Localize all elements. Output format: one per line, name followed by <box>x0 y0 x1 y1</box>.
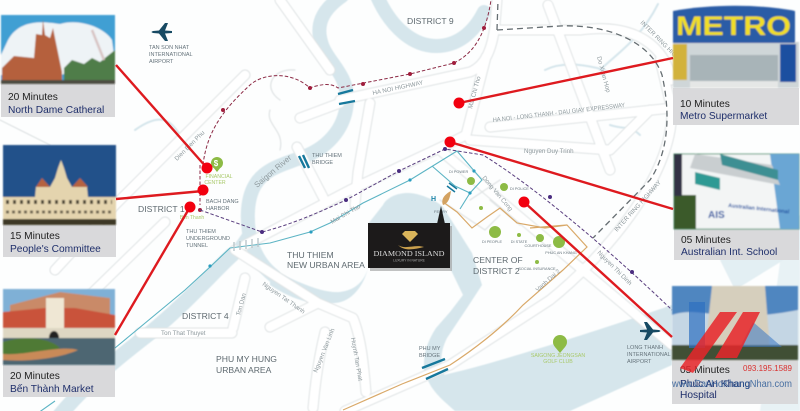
callout: Metro Supermarket <box>673 6 799 125</box>
green pin labels: DI POWER <box>449 170 468 174</box>
map labels: Do Xuan Hop <box>595 56 612 94</box>
diamond island marker: DIAMOND ISLAND <box>374 249 445 258</box>
callout: Ben Thanh Market: 20 Minutes <box>10 371 60 382</box>
map labels: THU THIEM <box>312 153 342 159</box>
callout: Australian International School: Australian International <box>728 203 790 215</box>
callout: Australian International School: AIS <box>708 210 725 221</box>
map labels: Nguyen Duy Trinh <box>524 148 574 155</box>
callout: People's Committee: People's Committee <box>10 244 101 255</box>
map labels: BRIDGE <box>419 353 440 359</box>
map: ring road dashes <box>497 0 667 238</box>
callout: People's Committee <box>3 145 116 257</box>
map: orange route <box>343 202 587 410</box>
green pin labels: H <box>431 196 436 203</box>
watermark: 093.195.1589 <box>743 363 792 373</box>
map labels: CENTER OF <box>473 255 523 265</box>
map labels: HA NOI HIGHWAY <box>372 79 424 97</box>
map labels: Nguyen Thi Dinh <box>596 249 633 287</box>
map labels: TUNNEL <box>186 243 208 249</box>
map labels: NEW URBAN AREA <box>287 260 365 270</box>
green pin labels: DI STATE <box>511 240 528 244</box>
map labels: Vanh Dai 2 <box>535 268 562 293</box>
map labels: Dien Bien Phu <box>173 129 207 162</box>
bridges <box>299 90 457 379</box>
green pin labels: COURTHOUSE <box>525 244 552 248</box>
green pin labels: SAIGONG JEONGSAN <box>531 353 585 359</box>
callout: Metro Supermarket: Metro Supermarket <box>680 111 767 122</box>
map: purple metro route <box>200 147 672 310</box>
map labels: PHU MY HUNG <box>216 354 277 364</box>
green map pins <box>211 157 567 353</box>
callout: Ben Thanh Market <box>3 289 115 397</box>
green pin labels: FERRY <box>434 209 448 214</box>
map labels: INTERNATIONAL <box>627 352 671 358</box>
callout: Metro Supermarket: 10 Minutes <box>680 99 730 110</box>
map labels: INTER RING HIGHWAY <box>639 19 690 71</box>
map labels: Ton That Thuyet <box>161 330 206 337</box>
map: teal tunnel route <box>38 151 482 411</box>
green pin labels: CENTER <box>204 180 226 186</box>
map labels: Nguyen Tat Thanh <box>261 281 307 316</box>
icon: Tan Son Nhat plane <box>152 23 172 41</box>
watermark <box>671 302 792 390</box>
diamond island marker <box>368 191 452 271</box>
map labels: BRIDGE <box>312 160 333 166</box>
map labels <box>138 16 690 382</box>
map labels: DISTRICT 1 <box>138 204 185 214</box>
map labels: AIRPORT <box>149 59 174 65</box>
map labels: Mai Chi Tho <box>467 75 483 110</box>
map labels: Dong Van Cong <box>480 175 514 213</box>
map labels: AIRPORT <box>627 359 652 365</box>
map labels: HA NOI - LONG THANH - DAU GIAY EXPRESSWAY <box>492 102 625 124</box>
callout: Australian International School: 05 Minutes <box>681 235 731 246</box>
callout: Australian International School <box>674 154 799 260</box>
watermark: www.CanHoKhangNhan.com <box>671 379 792 390</box>
map labels: Ton Dan <box>235 292 248 317</box>
callout: Phuc An Khang Hospital: 05 Minutes <box>680 365 730 376</box>
callout: Notre Dame <box>1 15 115 117</box>
callout: Phuc An Khang Hospital: Hospital <box>680 390 717 401</box>
green pin labels <box>180 159 585 365</box>
map labels: LONG THANH <box>627 345 663 351</box>
red connector lines <box>115 58 673 337</box>
green pin labels: GOLF CLUB <box>543 359 573 365</box>
map labels: Huynh Tan Phat <box>349 337 364 382</box>
callout: People's Committee: 15 Minutes <box>10 231 60 242</box>
map labels: DISTRICT 2 <box>473 266 520 276</box>
map labels: URBAN AREA <box>216 365 272 375</box>
green pin labels: DI POLICE <box>510 187 529 191</box>
green pin labels: FINANCIAL <box>205 174 233 180</box>
map: red metro route <box>198 0 491 212</box>
callout: Metro Supermarket: METRO <box>676 11 791 41</box>
map labels: BACH DANG <box>206 199 239 205</box>
red location dots <box>184 98 530 212</box>
map labels: Saigon River <box>253 153 294 190</box>
map labels: DISTRICT 4 <box>182 311 229 321</box>
map labels: UNDERGROUND <box>186 236 230 242</box>
map labels: HARBOR <box>206 206 230 212</box>
green pin labels: $ <box>214 159 219 168</box>
callout: Notre Dame: 20 Minutes <box>8 92 58 103</box>
callout: Phuc An Khang Hospital <box>672 286 798 404</box>
map labels: Nguyen Van Linh <box>312 327 337 374</box>
map labels: Mai Chi Tho <box>330 203 362 226</box>
callout: Ben Thanh Market: Bến Thành Market <box>10 383 94 395</box>
green pin labels: PHUC AN KHANG <box>545 251 577 255</box>
green pin labels: SOCIAL INSURANCE <box>518 267 556 271</box>
callout: Australian International School: Australian Int. School <box>681 247 777 258</box>
map labels: THU THIEM <box>287 250 334 260</box>
map labels: INTERNATIONAL <box>149 52 193 58</box>
map labels: PHU MY <box>419 346 441 352</box>
map labels: INTER RING HIGHWAY <box>613 179 663 233</box>
icon: Long Thanh plane <box>640 322 660 340</box>
green pin labels: DI PEOPLE <box>482 240 502 244</box>
map labels: DISTRICT 9 <box>407 16 454 26</box>
callout: Notre Dame: North Dame Catheral <box>8 105 104 116</box>
map labels: THU THIEM <box>186 229 216 235</box>
green pin labels: Ben Thanh <box>180 215 204 221</box>
callout: Phuc An Khang Hospital: Phúc An Khang <box>680 379 751 390</box>
map labels: TAN SON NHAT <box>149 45 190 51</box>
diamond island marker: LUXURY IN NATURE <box>393 258 426 262</box>
